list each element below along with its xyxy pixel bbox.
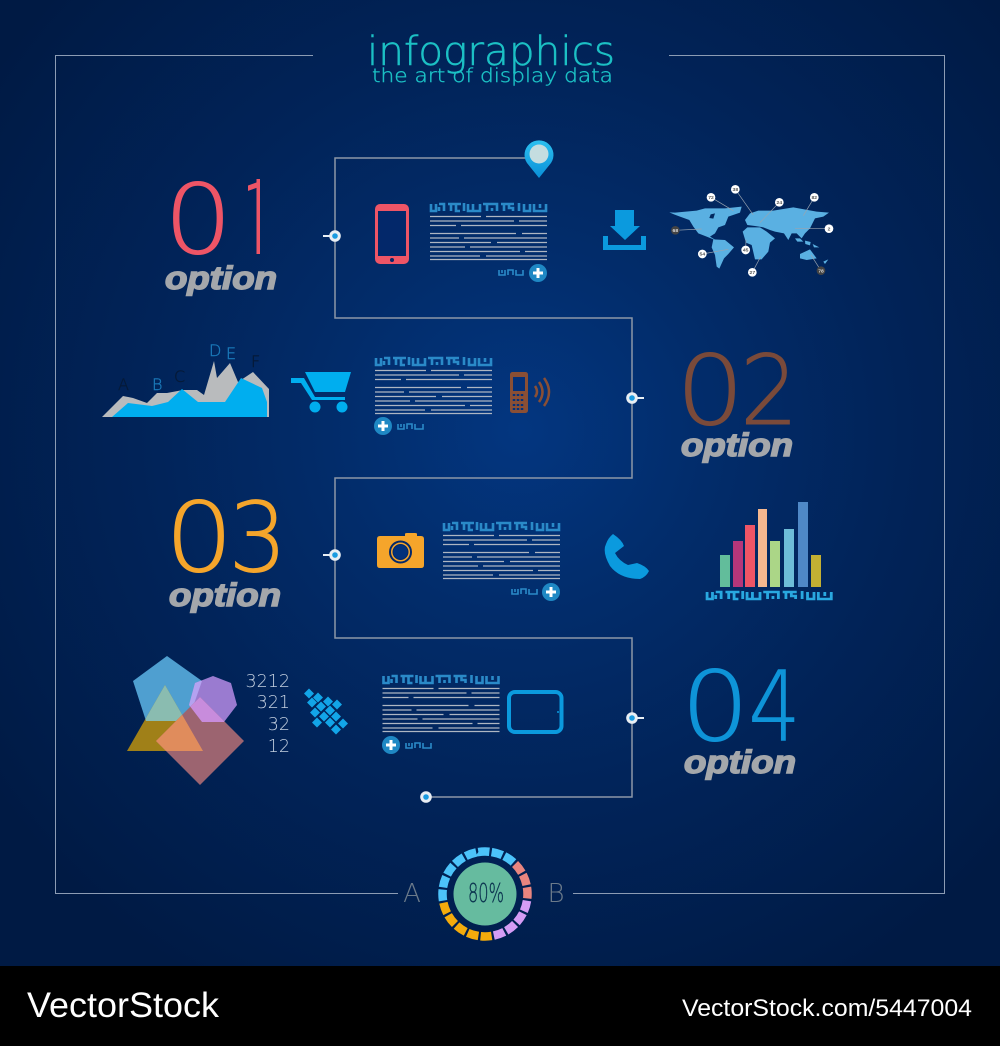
more button 2 [374,417,423,435]
world map [669,185,833,277]
donut gauge: 80% [468,879,504,909]
more button 4 [382,736,431,754]
more button 3 [512,583,560,601]
area chart [102,341,269,417]
icon: camera [377,533,424,568]
icon: location pin [524,140,554,178]
icon: shopping cart [291,372,351,412]
icon: mobile with signal [510,372,549,413]
area chart: D [209,341,221,360]
option 02 heading: 0 [676,335,744,448]
world map: 82 [812,195,817,201]
more button 1 [499,264,547,282]
option 03 heading: 3 [228,483,287,594]
world map: 68 [673,228,678,234]
world map: 38 [733,187,738,193]
icon: phone handset [605,534,649,579]
number list: 12 [268,737,290,757]
node end [422,793,430,801]
option 03 heading: option [169,577,281,613]
option 04 heading: option [684,744,796,780]
text block 1 [430,203,547,260]
area chart: A [118,375,129,394]
option 02 heading: option [681,427,793,463]
world map: 2 [828,226,831,232]
bar chart [707,502,831,599]
overlapping shapes chart [127,656,244,785]
option 04 heading: 4 [748,652,800,764]
icon: smartphone [375,204,409,264]
option 01 heading: 0 [164,164,232,277]
node 4 [628,714,644,722]
title: the art of display data [372,66,613,87]
option 03 heading [165,482,287,613]
option 02 heading: 2 [740,336,799,447]
number list: 32 [268,715,290,735]
world map: 54 [700,252,705,258]
icon: dot lattice [304,688,348,734]
text block 3 [443,522,560,578]
world map: 78 [818,268,824,274]
footer url: VectorStock.com/5447004 [682,995,972,1022]
text block 2 [375,357,492,414]
option 01 heading: option [165,260,277,296]
donut gauge [425,834,545,954]
icon: download [603,210,646,250]
area chart: C [174,367,185,386]
number list: 321 [257,693,290,713]
number list: 3212 [245,672,290,692]
number list [245,672,290,757]
option 04 heading [681,651,800,780]
world map: 27 [750,270,755,276]
option 03 heading: 0 [165,482,233,595]
label A: A [403,879,421,909]
icon: tablet [509,692,562,732]
connector path [335,158,632,797]
title: infographics [367,29,615,75]
world map: 72 [708,195,714,201]
node 2 [628,394,644,402]
text block 4 [382,675,500,732]
area chart: E [226,344,236,363]
footer logo: VectorStock [27,986,220,1025]
option 01 heading: 1 [224,164,292,277]
node 1 [323,232,339,240]
option 01 heading [165,179,276,296]
world map: 45 [743,248,749,254]
label B: B [547,879,565,909]
area chart: B [152,375,162,394]
footer bar [0,966,1000,1046]
option 04 heading: 0 [681,651,749,764]
world map: 24 [777,200,782,206]
area chart: F [251,352,260,371]
option 02 heading [676,335,799,463]
outer frame [56,56,944,894]
node 3 [323,551,339,559]
